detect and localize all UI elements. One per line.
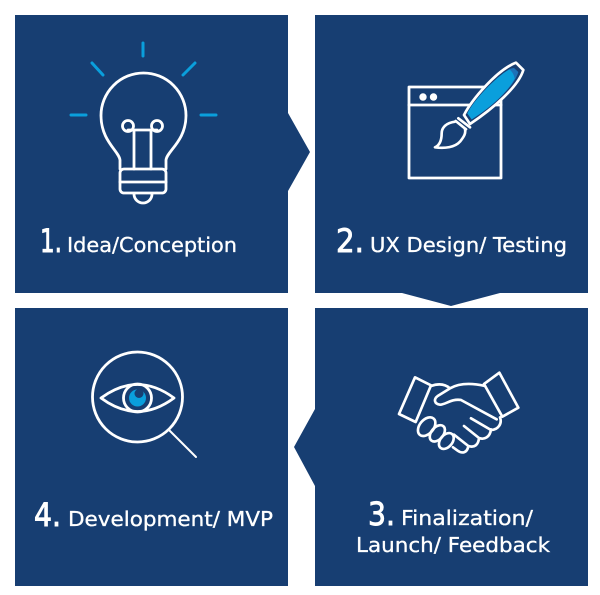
label: Idea/Conception: 1. [40, 222, 62, 260]
label: Finalization/ Launch/ Feedback: Launch/ Feedback [356, 533, 550, 557]
right cuff [484, 373, 518, 417]
pupil highlight [134, 389, 144, 398]
left cuff [399, 377, 431, 422]
icon: handshake [399, 373, 518, 452]
panel 4 background [15, 308, 288, 586]
left hand knuckles [414, 414, 457, 452]
brush handle fill [467, 69, 515, 119]
icon: browser window and paint brush [409, 63, 523, 178]
magnifier [92, 352, 196, 457]
label: UX Design/ Testing: UX Design/ Testing [370, 233, 567, 257]
brush [435, 63, 523, 148]
window buttons [419, 93, 437, 101]
label: Idea/Conception: Idea/Conception [67, 233, 237, 257]
bulb outline [101, 73, 186, 203]
browser window [409, 87, 501, 178]
label: UX Design/ Testing [336, 222, 567, 260]
icon: magnifier with eye [92, 352, 196, 457]
label: Finalization/ Launch/ Feedback [356, 495, 550, 557]
panel: step 4 development [15, 308, 288, 586]
brush handle [464, 63, 523, 124]
label: Development/ MVP: 4. [34, 496, 61, 534]
label: Finalization/ Launch/ Feedback: Finalization/ [401, 506, 533, 530]
brush handle tip shade [467, 68, 518, 119]
panel: step 2 UX design [315, 15, 588, 306]
panel 2 background with down arrow [315, 15, 588, 306]
label: UX Design/ Testing: 2. [336, 222, 364, 260]
brush ferrule and bristles [435, 118, 470, 148]
label: Development/ MVP: Development/ MVP [68, 507, 273, 531]
eye outline [101, 384, 174, 412]
panel 1 background with right arrow [15, 15, 310, 293]
pupil [129, 390, 146, 406]
clasped hands [431, 384, 501, 452]
label: Development/ MVP [34, 496, 273, 534]
panel: step 3 finalization [294, 308, 588, 586]
label: Idea/Conception [40, 222, 237, 260]
bulb light rays [71, 43, 216, 115]
label: Finalization/ Launch/ Feedback: 3. [368, 495, 395, 533]
icon: light bulb [71, 43, 216, 203]
panel: step 1 idea [15, 15, 310, 293]
panel 3 background with left arrow [294, 308, 588, 586]
